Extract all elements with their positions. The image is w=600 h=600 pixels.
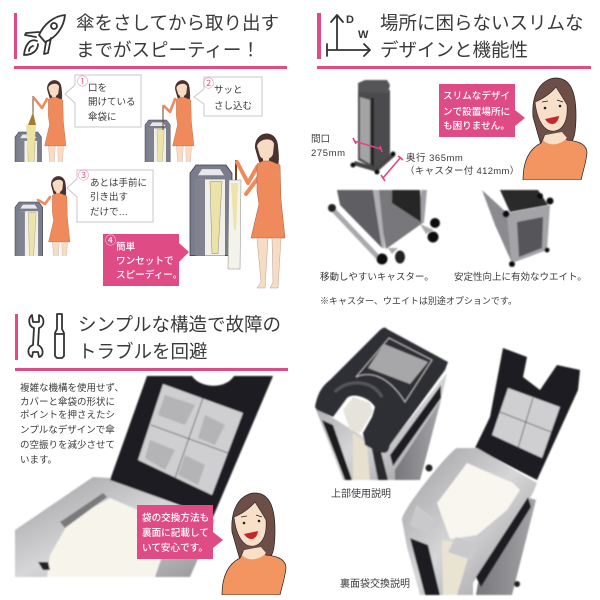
label: depth: 奥行 365mm [406,152,463,164]
callout: step 4: 簡単 [116,241,136,253]
heading: speed: 傘をさしてから取り出す [76,12,279,34]
photo: open lid [15,376,273,577]
callout: step 2: ② [203,77,214,90]
label: width [311,134,346,159]
photo: product with dimensions [350,80,403,181]
icon: dimension arrows: W [358,29,369,41]
heading: simple structure: トラブルを回避 [78,341,208,362]
callout: step 4: スピーディー。 [116,269,182,281]
callout: step 2 [194,77,262,116]
photo: casters [328,190,440,264]
callout: slim: スリムなデザイ [443,90,510,102]
heading: slim design: デザインと機能性 [380,40,528,60]
text: description: の空振りを減少させて [20,439,115,451]
heading: simple structure [15,314,288,371]
callout: step 4: ④ [105,234,116,247]
icon: wrench and screwdriver [28,314,64,358]
heading: simple structure: シンプルな構造で故障の [78,314,281,335]
photo: open unit [402,348,580,595]
label: width: 間口 [311,134,330,145]
callout: slim [439,84,525,137]
panel: slim design [311,12,591,306]
text: description: います。 [20,455,57,466]
callout: step 3: あとは手前に [90,177,147,189]
illustration: step 4 woman and bin [190,133,285,288]
icon: dimension arrows: D [346,14,354,26]
panel: simple structure [15,314,288,595]
panel: speed [14,12,287,288]
caption: top instructions: 上部使用説明 [331,487,391,500]
photo: closed top unit [315,328,448,480]
panel: product photos [315,328,580,595]
callout: step 4 [103,234,189,286]
heading: slim design [317,12,591,69]
caption: casters: 移動しやすいキャスター。 [320,271,434,283]
caption: bag replacement instructions: 裏面袋交換説明 [340,577,410,590]
note: options: ※キャスター、ウエイトは別途オプションです。 [320,296,517,306]
callout: step 2: さし込む [214,101,252,112]
text: description: 複雑な機構を使用せず、 [20,382,124,394]
text: description: ポイントを押さえたシ [20,409,115,421]
callout: step 4: ワンセットで [116,256,174,267]
text: description [20,382,124,466]
callout: step 1: ① [77,75,88,88]
caption: weight: 安定性向上に有効なウエイト。 [454,271,587,283]
callout: step 2: サッと [214,85,243,96]
icon: dimension arrows [327,14,370,56]
callout: step 3: だけで… [90,207,128,218]
photo: weight [482,190,554,267]
callout: step 3: ③ [78,169,89,182]
heading: slim design: 場所に困らないスリムな [380,12,584,34]
callout: step 3: 引き出す [90,191,128,203]
label: width: 275mm [311,148,346,159]
callout: step 3 [67,169,153,222]
callout: step 1: 口を [88,83,107,94]
heading: speed: までがスピーティー！ [76,40,260,60]
icon: rocket [24,15,65,55]
callout: slim: ンで設置場所に [443,106,510,118]
callout: bag change [137,505,223,559]
illustration: woman bust [222,493,286,595]
illustration: woman bust [523,78,587,180]
label: depth: （キャスター付 412mm） [405,165,520,177]
callout: step 1: 傘袋に [88,111,117,123]
label: depth [405,152,520,177]
heading: speed [14,12,287,69]
callout: bag change: 袋の交換方法も [142,512,209,524]
text: description: ンプルなデザインで傘 [20,424,115,436]
illustration: step 1 woman and bin [14,80,66,162]
callout: bag change: 裏面に記載して [142,527,209,539]
callout: slim: も困りません。 [443,121,510,132]
illustration: step 2 woman and bin [144,80,194,162]
illustration: step 3 woman and bin [14,176,70,256]
callout: bag change: いて安心です。 [142,542,208,554]
callout: step 1 [65,75,141,127]
callout: step 1: 開けている [88,97,136,108]
text: description: カバーと傘袋の形状に [20,396,115,408]
